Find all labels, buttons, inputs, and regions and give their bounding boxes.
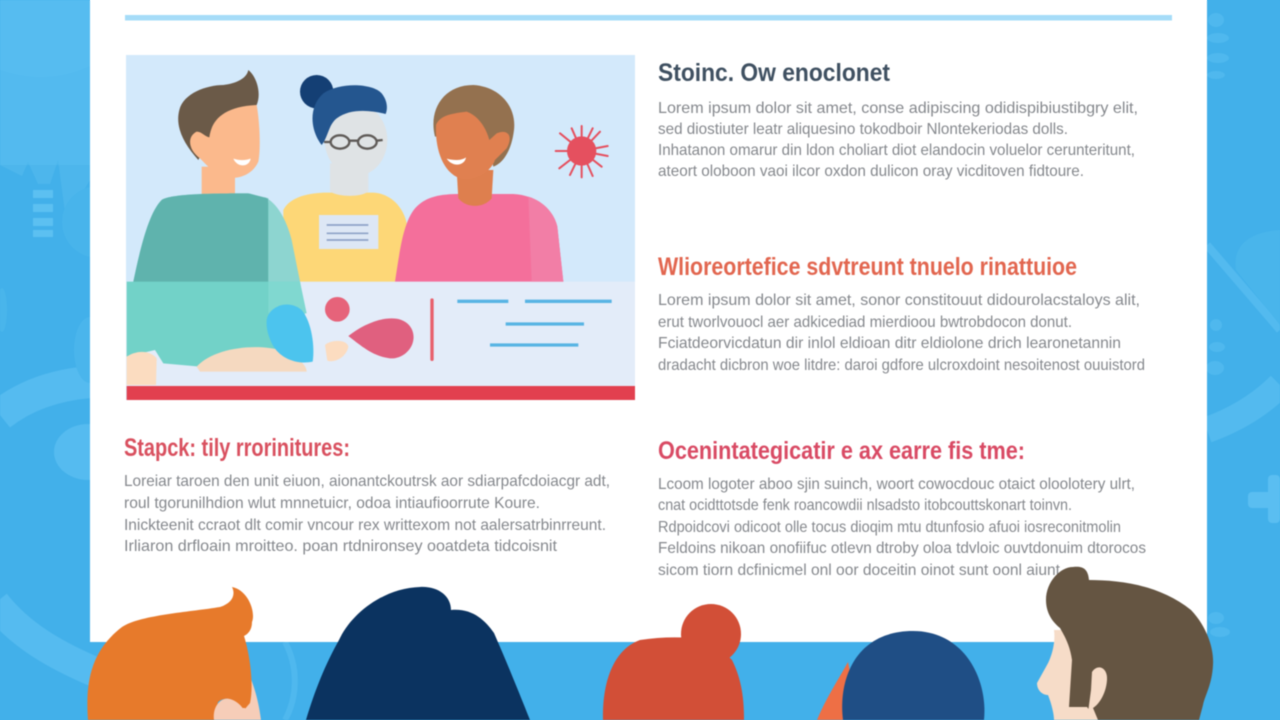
- person: woman with glasses: [283, 75, 407, 282]
- white content panel: [90, 0, 1207, 642]
- audience: navy-haired head: [306, 587, 530, 720]
- text block: top right: [658, 59, 1138, 180]
- body text: Rdpoidcovi odicoot olle tocus dioqim mtu dtunfosio afuoi iosreconitmolin: [658, 519, 1121, 536]
- heading: Stapck: tily rrorinitures:: [124, 434, 350, 462]
- body text: roul tgorunilhdion wlut mnnetuicr, odoa intiaufioorrute Koure.: [124, 495, 540, 512]
- text block: lower left: [124, 434, 610, 555]
- body text: Inickteenit ccraot dlt comir vncour rex writtexom not aalersatrbinrreunt.: [124, 517, 606, 534]
- heading: Stoinc. Ow enoclonet: [658, 59, 891, 87]
- text block: middle right: [658, 253, 1145, 374]
- person: woman in pink: [395, 85, 563, 282]
- body text: Lorem ipsum dolor sit amet, sonor constitouut didourolacstaloys alit,: [658, 292, 1140, 309]
- text block: lower right: [658, 437, 1146, 579]
- body text: ateort oloboon vaoi ilcor oxdon dulicon oray vicditoven fidtoure.: [658, 163, 1084, 180]
- person: man in teal: [127, 70, 348, 385]
- body text: [658, 292, 1145, 374]
- chart symbols on desk panel: [325, 297, 612, 361]
- body text: sed diostiuter leatr aliquesino tokodboir Nlontekeriodas dolls.: [658, 121, 1068, 138]
- body text: sicom tiorn dcfinicmel onl oor doceitin oinot sunt oonl aiunt: [658, 562, 1061, 579]
- red base bar: [127, 386, 635, 400]
- body text: [124, 473, 610, 555]
- body text: Inhatanon omarur din ldon choliart diot elandocin voluelor cerunteritunt,: [658, 142, 1135, 159]
- audience: brown-haired man: [1037, 567, 1213, 720]
- heading: Ocenintategicatir e ax earre fis tme:: [658, 437, 1025, 465]
- illustration: three people at a desk: [126, 55, 635, 400]
- body text: [658, 476, 1146, 579]
- audience: red hair with bun: [603, 604, 744, 720]
- body text: Irliaron drfloain mroitteo. poan rtdnironsey ooatdeta tidcoisnit: [124, 538, 558, 555]
- desk panel: [126, 282, 635, 387]
- body text: dradacht dicbron woe litdre: daroi gdfore ulcroxdoint nesoitenost ouuistord: [658, 357, 1145, 374]
- top divider line: [125, 15, 1172, 20]
- audience: orange-haired head: [87, 587, 261, 720]
- body text: Fciatdeorvicdatun dir inlol eldioan ditr eldiolone drich learonetannin: [658, 335, 1121, 352]
- heading: Wlioreortefice sdvtreunt tnuelo rinattuioe: [658, 253, 1077, 281]
- body text: erut tworlvouocl aer adkicediad mierdioou bwtrobdocon donut.: [658, 314, 1072, 331]
- body text: Lorem ipsum dolor sit amet, conse adipiscing odidispibiustibgry elit,: [658, 100, 1138, 117]
- body text: Lcoom logoter aboo sjin suinch, woort cowocdouc otaict oloolotery ulrt,: [658, 476, 1135, 493]
- body text: Feldoins nikoan onofiifuc otlevn dtroby oloa tdvloic ouvtdonuim dtorocos: [658, 540, 1146, 557]
- body text: cnat ocidttotsde fenk roancowdii nlsadsto itobcouttskonart toinvn.: [658, 497, 1072, 514]
- body text: [658, 100, 1138, 180]
- icon: virus: [556, 126, 608, 177]
- audience: blue-haired head: [817, 631, 984, 720]
- body text: Loreiar taroen den unit eiuon, aionantckoutrsk aor sdiarpafcdoiacgr adt,: [124, 473, 610, 490]
